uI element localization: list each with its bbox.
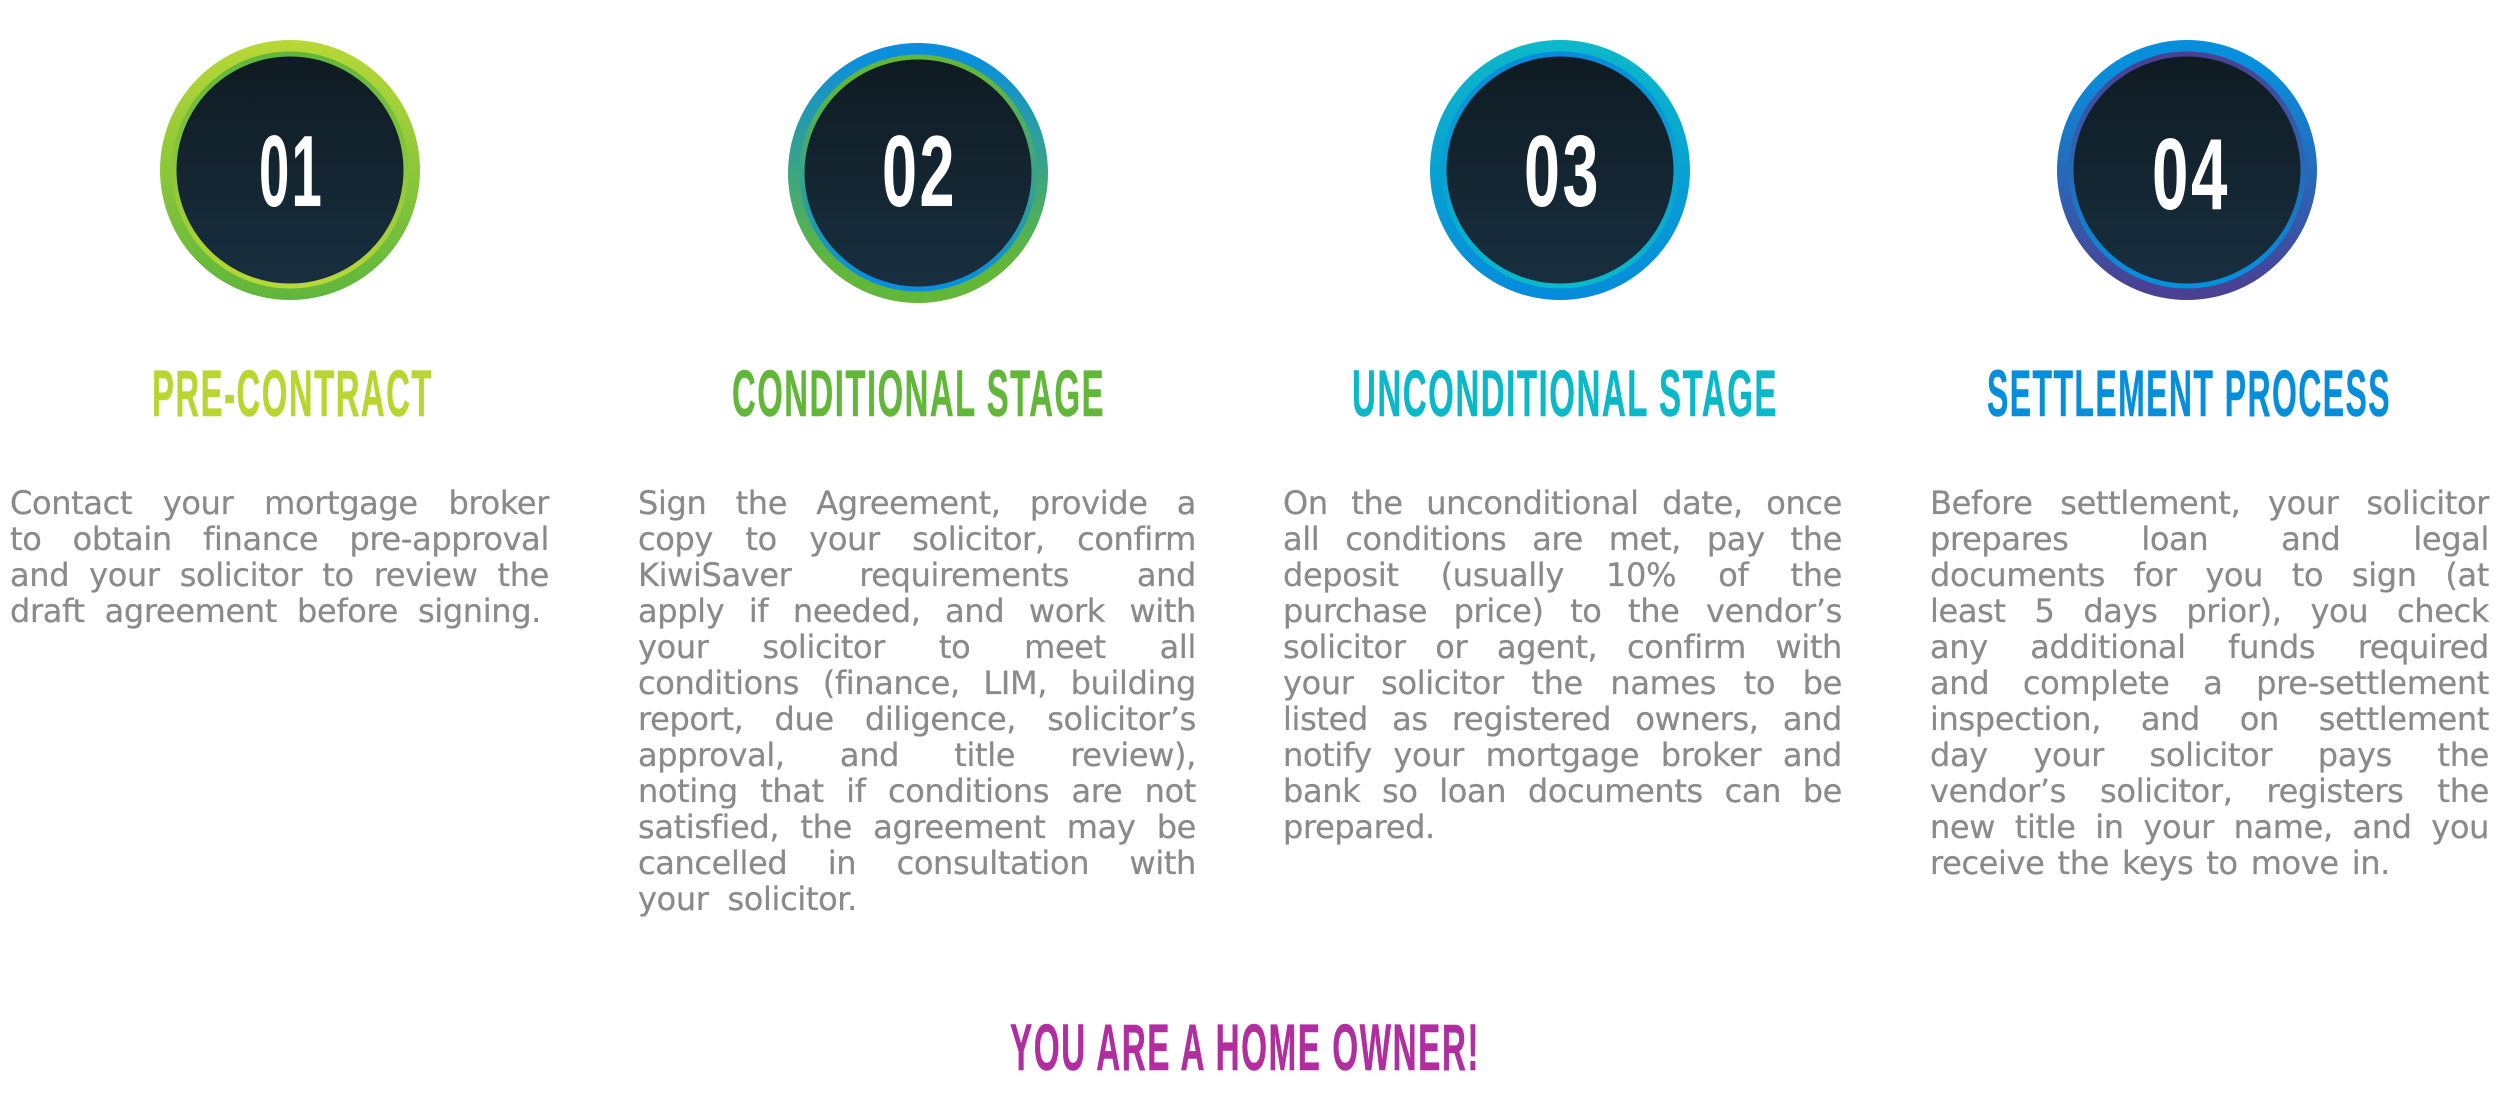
text block: conditional stage description: your solicitor to meet all [638,628,1196,666]
text block: conditional stage description: noting that if conditions are not [638,772,1196,810]
text block: settlement process description: least 5 days prior), you check [1930,592,2489,630]
icon: number badge 01: 01 [259,116,324,228]
text block: pre-contract description: draft agreement before signing. [10,592,541,630]
text block: settlement process description: receive the keys to move in. [1930,844,2390,882]
panel: pre-contract [10,40,2316,630]
text block: unconditional stage description: On the unconditional date, once [1283,484,1842,522]
icon: number badge 02 [788,43,1048,303]
icon: number badge 03: 03 [1524,116,1601,228]
closing message: YOU ARE A HOME OWNER! [1010,1010,1480,1084]
text block: settlement process description: prepares loan and legal [1930,520,2489,558]
panel: unconditional stage: UNCONDITIONAL STAGE [1352,356,1778,430]
text block: conditional stage description: satisfied, the agreement may be [638,808,1196,846]
text block: pre-contract description: to obtain finance pre-approval [10,520,549,558]
panel: conditional stage: CONDITIONAL STAGE [732,356,1105,430]
text block: unconditional stage description [1283,484,1842,846]
text block: settlement process description: vendor’s solicitor, registers the [1930,772,2489,810]
text block: unconditional stage description: purchase price) to the vendor’s [1283,592,1842,630]
text block: settlement process description: and complete a pre-settlement [1930,664,2489,702]
text block: settlement process description: day your solicitor pays the [1930,736,2489,774]
text block: conditional stage description: your solicitor. [638,880,857,918]
text block: conditional stage description: apply if needed, and work with [638,592,1196,630]
icon: number badge 02: 02 [882,116,957,228]
text block: pre-contract description: and your solicitor to review the [10,556,549,594]
icon: number badge 03 [1430,40,1690,300]
text block: settlement process description: documents for you to sign (at [1930,556,2489,594]
text block: unconditional stage description: deposit (usually 10% of the [1283,556,1842,594]
text block: unconditional stage description: your solicitor the names to be [1283,664,1842,702]
text block: conditional stage description [638,484,1196,918]
icon: number badge 04: 04 [2152,119,2230,231]
panel: unconditional stage [1283,40,2316,846]
text block: conditional stage description: KiwiSaver requirements and [638,556,1196,594]
panel: settlement process [1930,40,2490,882]
text block: pre-contract description: Contact your mortgage broker [10,484,549,522]
text block: settlement process description [1930,484,2490,882]
text block: unconditional stage description: listed as registered owners, and [1283,700,1842,738]
text block: unconditional stage description: prepared. [1283,808,1435,846]
panel: pre-contract: PRE-CONTRACT [152,356,433,430]
text block: unconditional stage description: notify your mortgage broker and [1283,736,1842,774]
text block: unconditional stage description: solicitor or agent, confirm with [1283,628,1842,666]
panel: conditional stage [638,40,2316,918]
text block: conditional stage description: approval, and title review), [638,736,1196,774]
icon: number badge 04 [2057,40,2317,300]
text block: unconditional stage description: bank so loan documents can be [1283,772,1842,810]
text block: conditional stage description: cancelled in consultation with [638,844,1196,882]
text block: conditional stage description: conditions (finance, LIM, building [638,664,1196,702]
icon: number badge 01 [160,40,420,300]
text block: unconditional stage description: all conditions are met, pay the [1283,520,1842,558]
text block: settlement process description: inspection, and on settlement [1930,700,2489,738]
text block: settlement process description: Before settlement, your solicitor [1930,484,2489,522]
text block: pre-contract description [10,484,550,630]
text block: conditional stage description: report, due diligence, solicitor’s [638,700,1196,738]
text block: conditional stage description: Sign the Agreement, provide a [638,484,1196,522]
text block: settlement process description: any additional funds required [1930,628,2489,666]
text block: conditional stage description: copy to your solicitor, confirm [638,520,1196,558]
text block: settlement process description: new title in your name, and you [1930,808,2489,846]
